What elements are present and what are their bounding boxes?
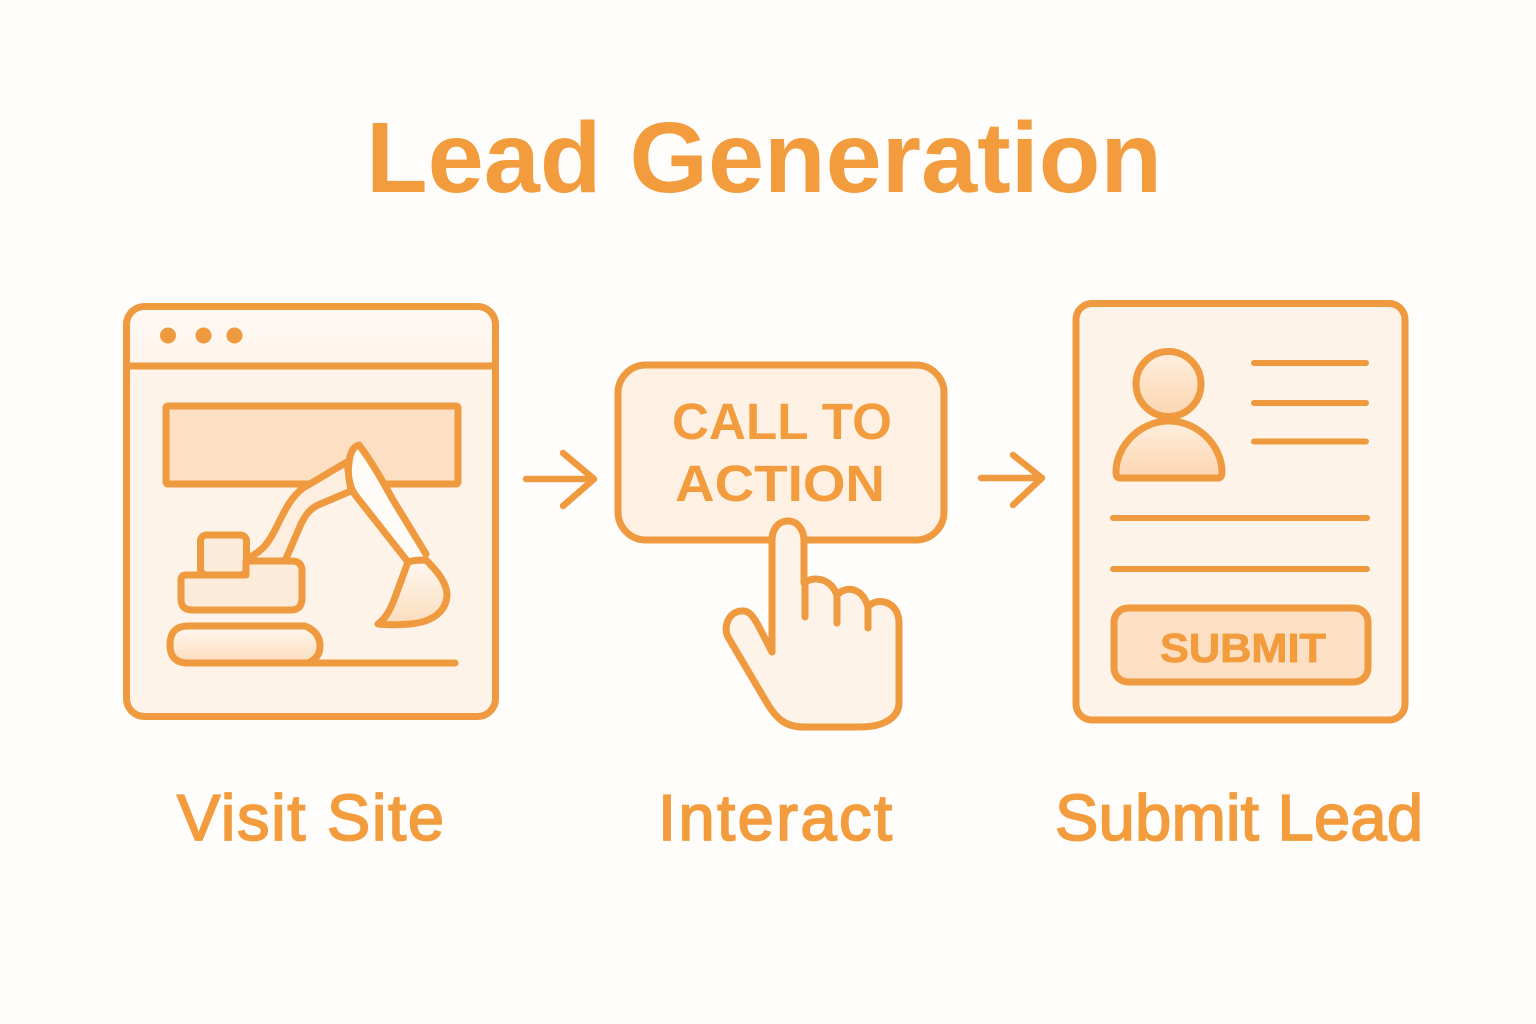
icon: pointing hand bbox=[726, 521, 899, 727]
button text: ACTION bbox=[675, 455, 885, 512]
submit button: SUBMIT bbox=[1160, 625, 1326, 671]
icon: user avatar bbox=[1116, 352, 1222, 478]
panel: visit site browser window bbox=[126, 306, 496, 716]
submit button bbox=[1114, 608, 1368, 682]
button text bbox=[672, 393, 892, 512]
label: submit lead: Submit Lead bbox=[1055, 781, 1423, 854]
browser dots bbox=[160, 328, 242, 344]
icon: excavator bbox=[170, 445, 455, 663]
label: interact: Interact bbox=[658, 781, 892, 854]
hero banner bbox=[166, 406, 458, 484]
browser title bar bbox=[127, 362, 495, 370]
browser frame bbox=[126, 306, 496, 716]
title: Lead Generation bbox=[366, 102, 1162, 214]
form frame bbox=[1076, 304, 1405, 720]
button bbox=[618, 365, 944, 540]
label: visit site: Visit Site bbox=[177, 781, 444, 854]
arrow: interact to submit bbox=[981, 455, 1042, 505]
arrow: visit to interact bbox=[526, 453, 594, 506]
panel: call to action button bbox=[618, 365, 944, 727]
button text: CALL TO bbox=[672, 393, 892, 450]
panel: lead form bbox=[1076, 304, 1405, 720]
form lines bbox=[1113, 363, 1367, 569]
